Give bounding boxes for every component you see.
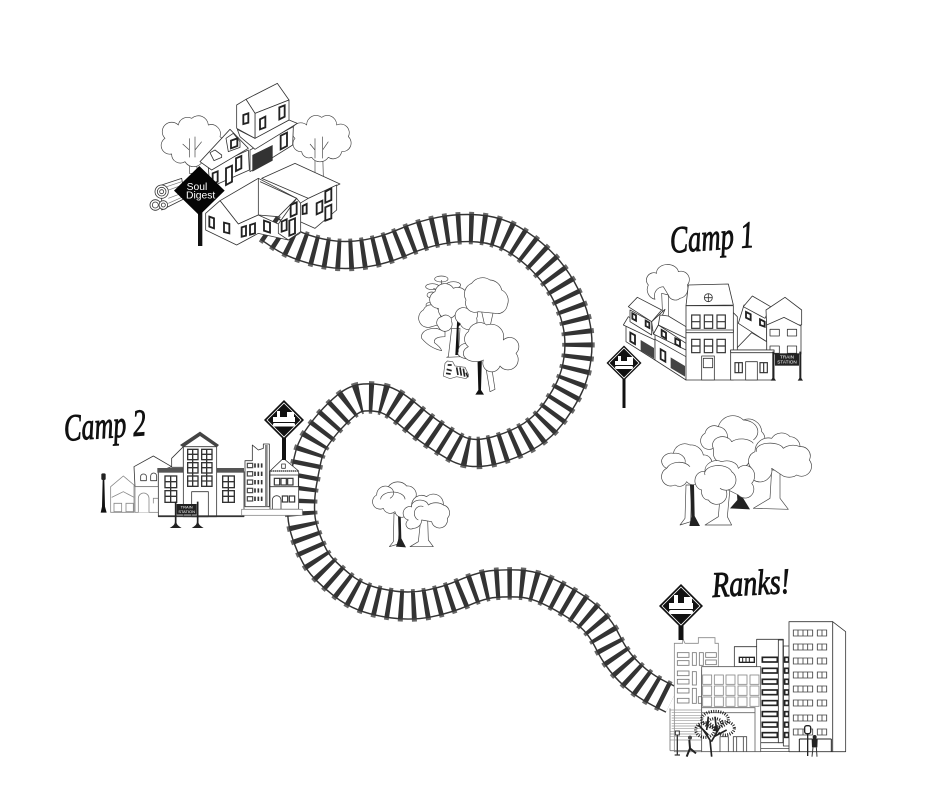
icon: right tree (292, 115, 351, 177)
front building (702, 667, 761, 752)
town: Camp 1 (623, 265, 803, 381)
sign: train crossing Ranks (659, 584, 703, 640)
forest: right trees (662, 416, 812, 526)
central building (157, 432, 244, 517)
icon: street lamp (101, 473, 107, 513)
icon: lamp and walker (675, 731, 696, 757)
icon: left tree (662, 444, 715, 526)
town: Ranks (670, 622, 846, 757)
icon: right tree (749, 433, 812, 509)
left townhouses (623, 297, 686, 380)
middle towers (734, 639, 790, 752)
sign: Soul Digest (174, 166, 225, 246)
grey houses (111, 447, 183, 512)
pavement strip (242, 509, 302, 515)
icon: back-left tree (419, 276, 478, 357)
tall right tower (789, 622, 846, 752)
icon: black tree (696, 711, 734, 757)
town: Camp 2 (101, 432, 302, 527)
sign: train station: STATION (178, 509, 195, 514)
icon: back tree (701, 416, 765, 509)
sign: Soul Digest: Digest (186, 191, 215, 202)
icon: front tree (695, 461, 755, 525)
heading: Camp 1: Camp 1 (668, 214, 755, 262)
railway track (268, 228, 672, 700)
forest: lower-centre trees (373, 482, 450, 547)
icon: logs (150, 178, 185, 210)
start village: Soul Digest (150, 83, 351, 246)
sign: train crossing Camp 1 (606, 346, 642, 408)
icon: back-right tree (464, 278, 508, 327)
forest: centre trees with tiger (419, 276, 519, 395)
sign: train station: TRAIN (181, 505, 193, 510)
icon: tree behind town (646, 265, 689, 317)
icon: tiger (443, 361, 469, 379)
lower right wing (262, 163, 340, 228)
icon: right tree (403, 494, 450, 547)
right houses (735, 296, 802, 354)
train station sign: STATION (777, 360, 797, 365)
train station sign: TRAIN (780, 355, 794, 360)
heading: Camp 2: Camp 2 (62, 402, 147, 450)
small house (270, 458, 299, 509)
tower (245, 444, 269, 507)
left building (670, 638, 718, 752)
icon: left tree (373, 482, 420, 547)
sign: train crossing Camp 2 (264, 400, 304, 460)
icon: bus stop and person (805, 726, 818, 757)
lower front house (206, 178, 301, 245)
middle house (200, 129, 249, 187)
icon: left tree (161, 116, 224, 173)
low front building (731, 350, 774, 380)
icon: front tree (458, 323, 519, 395)
train station sign (771, 352, 803, 381)
central tall building (686, 284, 737, 380)
heading: Ranks!: Ranks! (710, 561, 791, 605)
sign: train station (172, 502, 201, 527)
sign: Soul Digest: Soul (187, 182, 207, 193)
top house (237, 83, 297, 172)
